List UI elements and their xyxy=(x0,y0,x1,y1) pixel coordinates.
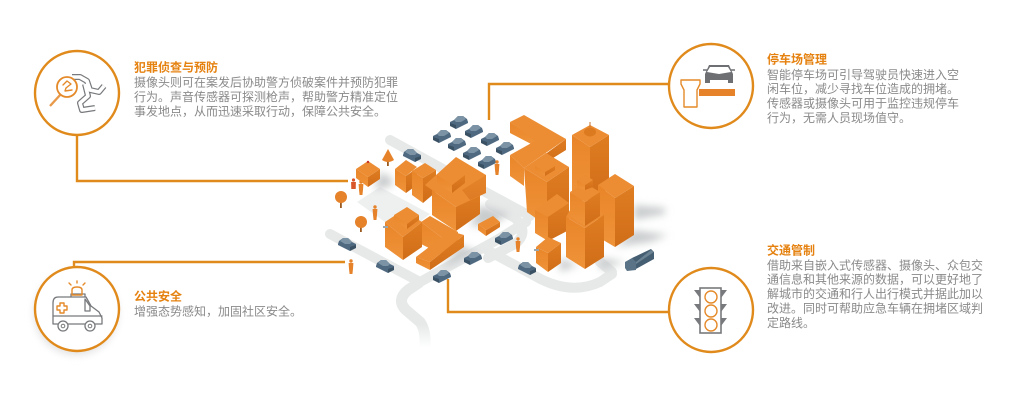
heading: 公共安全 xyxy=(134,288,182,304)
text block: 增强态势感知，加固社区安全。 xyxy=(134,304,302,318)
building: right tower xyxy=(598,174,634,247)
text block: 摄像头则可在案发后协助警方侦破案件并预防犯罪 xyxy=(134,74,398,90)
building: twin block B xyxy=(412,163,436,203)
building: small box xyxy=(356,161,380,187)
panel: public safety xyxy=(34,267,302,355)
text block: 通信息和其他来源的数据，可以更好地了 xyxy=(767,272,983,286)
roads xyxy=(330,140,612,348)
building: front tower xyxy=(383,207,422,260)
isometric city illustration xyxy=(330,115,668,348)
connector: crime prevention xyxy=(77,135,348,181)
trees xyxy=(335,149,394,232)
text block: 传感器或摄像头可用于监控违规停车 xyxy=(767,96,959,110)
icon: parking barrier and car xyxy=(669,44,753,128)
building: twin block A xyxy=(395,160,417,193)
icon: traffic light xyxy=(669,268,753,352)
building: long low block xyxy=(416,231,464,270)
text block xyxy=(767,258,983,330)
building: mid wing xyxy=(421,216,458,256)
people xyxy=(349,160,520,274)
text block: 解城市的交通和行人出行模式并据此加以 xyxy=(767,286,983,301)
text block: 事发地点，从而迅速采取行动，保障公共安全。 xyxy=(134,104,386,118)
text block: 定路线。 xyxy=(767,315,815,330)
icon: ambulance xyxy=(34,267,119,355)
panel: traffic control xyxy=(669,242,983,352)
text block xyxy=(767,67,959,125)
building: central tower xyxy=(566,175,604,269)
connector: public safety xyxy=(74,262,345,268)
parked cars xyxy=(433,116,514,169)
connector: traffic xyxy=(448,279,669,312)
panel: parking management xyxy=(669,44,959,128)
building: big hall xyxy=(425,157,486,231)
text block: 行为，无需人员现场值守。 xyxy=(767,110,911,125)
connector: parking xyxy=(489,84,669,120)
text block xyxy=(134,74,398,118)
heading: 犯罪侦查与预防 xyxy=(134,60,218,74)
building: small low box xyxy=(478,216,500,236)
icon: magnifier and running figure xyxy=(35,51,119,135)
text block: 改进。同时可帮助应急车辆在拥堵区域判 xyxy=(767,300,983,316)
heading: 交通管制 xyxy=(767,242,815,258)
building: tall tower xyxy=(572,122,609,200)
heading: 停车场管理 xyxy=(767,52,827,66)
road cars xyxy=(338,149,536,283)
text block: 借助来自嵌入式传感器、摄像头、众包交 xyxy=(767,258,983,272)
building shadows xyxy=(374,172,668,272)
text block: 智能停车场可引导驾驶员快速进入空 xyxy=(767,67,959,82)
text block: 行为。声音传感器可探测枪声，帮助警方精准定位 xyxy=(134,89,398,104)
panel: crime prevention xyxy=(35,51,398,135)
truck xyxy=(625,249,654,271)
building: stepped tower xyxy=(524,153,569,272)
building: chevron block xyxy=(510,115,566,186)
text block: 闲车位，减少寻找车位造成的拥堵。 xyxy=(767,81,959,96)
